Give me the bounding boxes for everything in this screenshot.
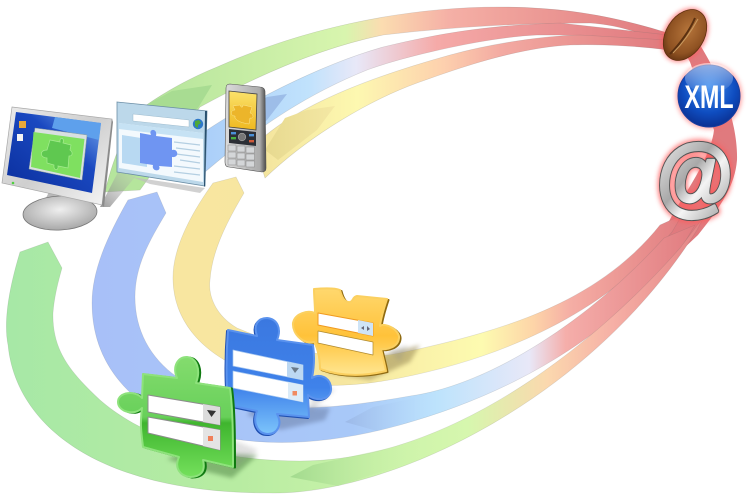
XML sheen bbox=[685, 63, 733, 93]
light cast shadows bbox=[232, 345, 408, 470]
blue puzzle face bbox=[226, 318, 331, 434]
bottom arrowheads bbox=[290, 398, 430, 486]
top arcs: data flowing to devices bbox=[105, 7, 668, 192]
puzzle piece: orange form bbox=[293, 288, 401, 376]
bottom blue arc bbox=[92, 192, 695, 442]
application window bbox=[29, 128, 87, 180]
blue bottom arrowhead bbox=[345, 398, 415, 431]
orange text field bbox=[318, 331, 373, 355]
green puzzle edge bbox=[120, 358, 235, 478]
@ glyph: @ bbox=[657, 128, 733, 224]
source icon: @ email bbox=[657, 128, 733, 224]
page content bbox=[119, 123, 203, 182]
monitor screen bbox=[7, 112, 101, 193]
desktop icons bbox=[17, 121, 26, 141]
green puzzle shadow bbox=[167, 452, 258, 478]
blue puzzle shadow bbox=[247, 405, 330, 430]
phone screen bbox=[229, 91, 257, 130]
source icon: coffee bean bbox=[652, 0, 718, 71]
blue puzzle cutout bbox=[140, 130, 177, 170]
bean glow bbox=[652, 0, 718, 71]
bottom arcs: data flowing to puzzle components bbox=[6, 177, 705, 493]
@ glow: @ bbox=[657, 128, 733, 224]
top yellow arc bbox=[255, 35, 668, 178]
red connector behind source icons bbox=[660, 30, 737, 250]
blue puzzle edge bbox=[226, 319, 330, 435]
orange puzzle edge bbox=[294, 289, 401, 376]
@ dark outline: @ bbox=[657, 128, 733, 224]
orange spinner field bbox=[318, 313, 373, 336]
XML glow bbox=[676, 63, 742, 129]
monitor cast shadow bbox=[100, 172, 136, 207]
blue dropdown field bbox=[233, 350, 303, 380]
green bottom arrowhead bbox=[290, 441, 430, 486]
puzzle piece: green form bbox=[118, 357, 235, 478]
XML sphere bbox=[678, 65, 740, 127]
monitor stand bbox=[22, 190, 98, 232]
top blue arc bbox=[190, 23, 668, 172]
source icon: XML globe bbox=[676, 63, 742, 129]
bean body bbox=[654, 2, 716, 68]
monitor frame bbox=[2, 107, 112, 205]
bean crease bbox=[670, 18, 695, 54]
address bar bbox=[133, 114, 189, 127]
top arrowheads bbox=[145, 85, 335, 160]
green puzzle face bbox=[118, 357, 233, 477]
browser cast shadow bbox=[132, 177, 205, 193]
orange puzzle face bbox=[293, 288, 399, 375]
device: mobile phone bbox=[225, 84, 266, 172]
phone control panel bbox=[229, 129, 256, 146]
browser frame bbox=[117, 102, 207, 186]
power light bbox=[12, 182, 14, 184]
phone keypad bbox=[228, 145, 254, 167]
green top arrowhead bbox=[145, 85, 212, 125]
phone body bbox=[225, 84, 266, 172]
page text lines bbox=[174, 142, 200, 175]
green dropdown field bbox=[148, 395, 220, 425]
globe icon bbox=[193, 119, 203, 129]
green date field bbox=[148, 417, 220, 450]
green puzzle cutout bbox=[41, 138, 72, 170]
yellow top arrowhead bbox=[265, 106, 335, 160]
blue date field bbox=[233, 371, 303, 402]
bottom green arc bbox=[6, 215, 705, 493]
orange puzzle shadow bbox=[325, 345, 420, 380]
device: browser window bbox=[117, 102, 207, 193]
yellow puzzle on screen bbox=[231, 105, 253, 124]
blue top arrowhead bbox=[250, 94, 287, 135]
device: monitor bbox=[2, 107, 136, 232]
bottom yellow arc bbox=[173, 177, 682, 385]
puzzle piece: blue form bbox=[226, 318, 331, 435]
shadows under puzzles bbox=[167, 345, 420, 478]
top green arc bbox=[105, 7, 668, 192]
